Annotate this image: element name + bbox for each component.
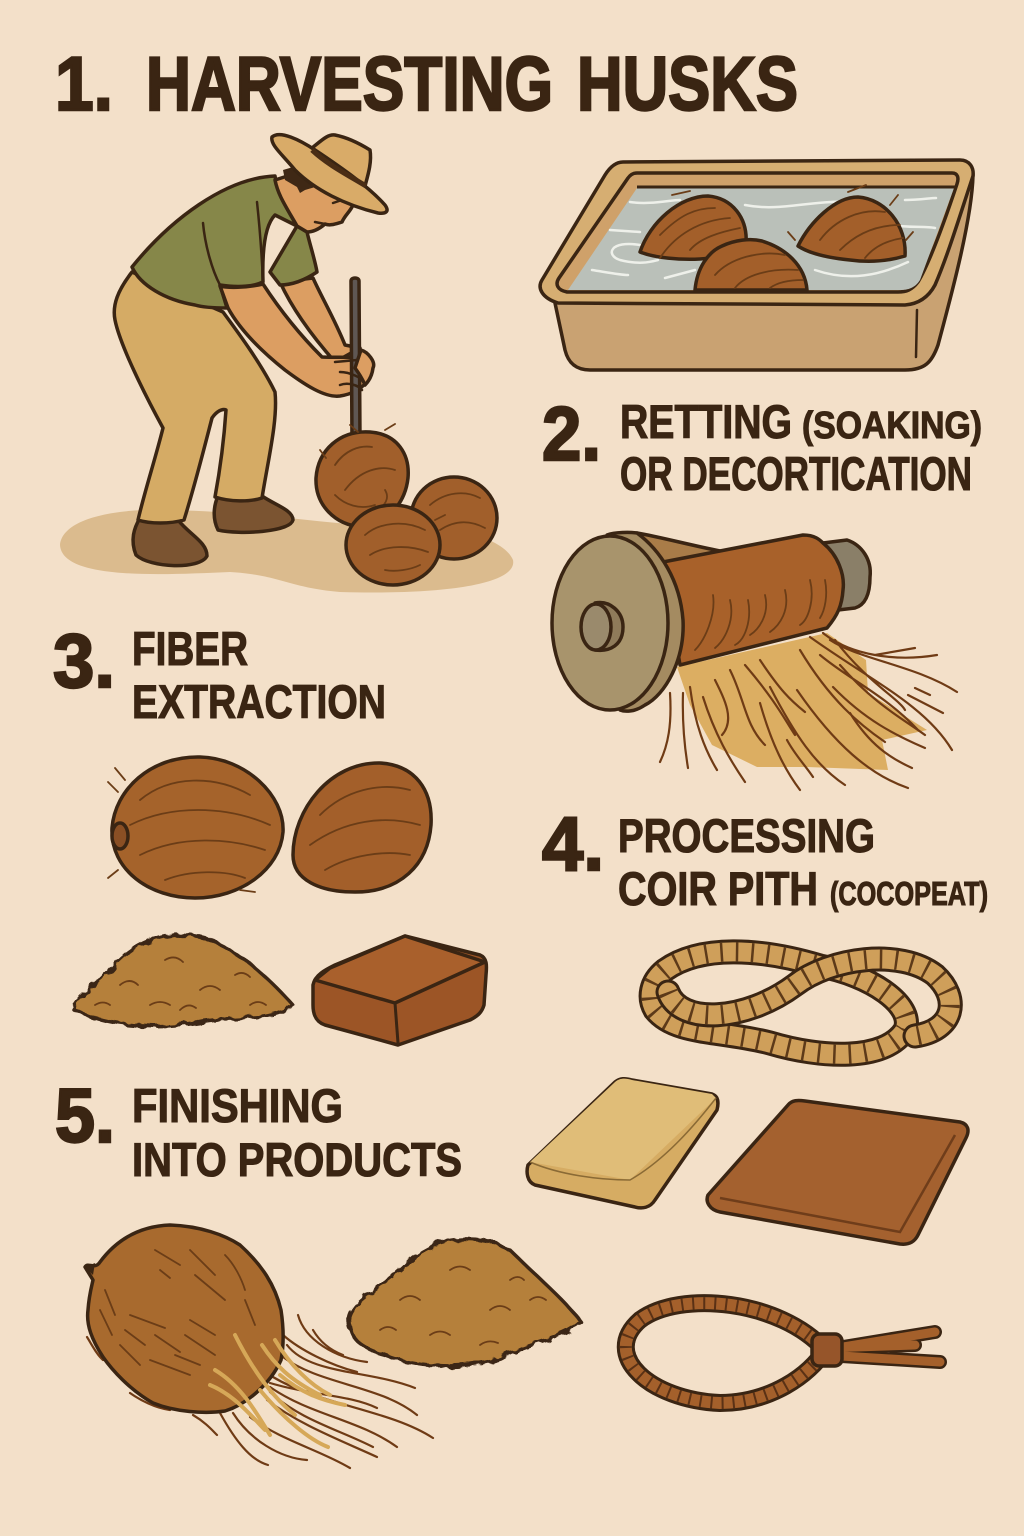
husk: front bbox=[695, 240, 807, 290]
boot: right bbox=[214, 496, 293, 532]
title: step 1 harvesting husks: HARVESTING bbox=[146, 42, 553, 127]
step 4 heading: PROCESSING bbox=[618, 809, 875, 862]
step 5 heading bbox=[132, 1079, 462, 1186]
rope knot bbox=[812, 1334, 842, 1366]
coconut: front bbox=[346, 505, 440, 585]
water bbox=[568, 188, 954, 290]
hair bbox=[283, 165, 322, 193]
roller drum bbox=[663, 535, 843, 665]
title: step 1 harvesting husks: 1. bbox=[55, 42, 113, 127]
golden fibers bbox=[210, 1335, 345, 1447]
illustration: farmer husking coconuts bbox=[60, 135, 513, 593]
step 3 number: 3. bbox=[53, 619, 115, 704]
step 3 heading: EXTRACTION bbox=[132, 675, 386, 728]
illustration: soaking tub with husks bbox=[540, 160, 973, 370]
boot: left bbox=[133, 518, 207, 566]
step 2 number: 2. bbox=[542, 392, 601, 477]
step 4 heading bbox=[618, 809, 988, 915]
shirt folds bbox=[203, 202, 263, 308]
disc hub bbox=[581, 604, 611, 650]
eye and mouth bbox=[315, 200, 342, 224]
step 2 heading: (SOAKING) bbox=[802, 405, 982, 447]
illustration: coir brick bbox=[313, 936, 486, 1045]
title: step 1 harvesting husks bbox=[55, 42, 798, 127]
far arm bbox=[280, 278, 360, 362]
husk: left bbox=[640, 196, 746, 259]
drum texture bbox=[695, 580, 826, 650]
neck and face bbox=[275, 172, 353, 232]
step 4 number: 4. bbox=[542, 802, 604, 887]
tub body bbox=[555, 175, 973, 370]
hub boss bbox=[595, 603, 623, 650]
step 3 heading bbox=[132, 622, 386, 728]
illustration: coiled coir rope bbox=[651, 952, 950, 1054]
roller axle end bbox=[823, 540, 870, 610]
illustration: brown coir board bbox=[707, 1100, 968, 1244]
husk tip bbox=[85, 1263, 95, 1275]
husk: right bbox=[798, 197, 905, 261]
tassel strands bbox=[825, 1332, 940, 1362]
step 5 heading: INTO PRODUCTS bbox=[132, 1133, 462, 1186]
illustration: coir pith pile bbox=[72, 934, 293, 1026]
trousers bbox=[114, 272, 276, 523]
crossing band bbox=[668, 959, 950, 1036]
step 2 heading bbox=[620, 395, 982, 500]
step 2 heading: RETTING bbox=[620, 395, 792, 448]
tub rim bbox=[540, 160, 973, 305]
coconut: on spike bbox=[316, 432, 408, 527]
tub inner wall bbox=[557, 173, 958, 292]
shirt body bbox=[132, 176, 297, 308]
hub flange bbox=[607, 532, 683, 711]
right sleeve bbox=[270, 226, 317, 285]
loose fibers bbox=[87, 1315, 433, 1468]
rear flange bbox=[637, 533, 720, 565]
title: step 1 harvesting husks: HUSKS bbox=[577, 42, 798, 127]
fibers bbox=[660, 633, 957, 790]
illustration: decorticating roller and fibers bbox=[552, 532, 957, 790]
illustration: large husk with fibers bbox=[85, 1225, 433, 1468]
metal spike bbox=[351, 278, 360, 440]
ground shadow bbox=[60, 510, 513, 593]
water ripples bbox=[592, 198, 936, 278]
husk texture bbox=[100, 1250, 255, 1375]
husk texture bbox=[660, 185, 913, 288]
fiber bundle bbox=[677, 633, 927, 770]
tub corner line bbox=[916, 310, 917, 357]
rope loop bbox=[626, 1303, 825, 1403]
outer band bbox=[651, 952, 906, 1054]
disc bbox=[552, 536, 668, 710]
fingers bbox=[335, 360, 366, 390]
illustration: left coconut bbox=[108, 757, 283, 898]
step 5 heading: FINISHING bbox=[132, 1079, 343, 1132]
hat bbox=[272, 135, 387, 213]
illustration: tan coir mat bbox=[527, 1079, 718, 1208]
step 5 number: 5. bbox=[55, 1074, 115, 1159]
illustration: right coconut bbox=[293, 763, 431, 892]
illustration: rope loop with tied tassel bbox=[626, 1303, 940, 1403]
step 3 heading: FIBER bbox=[132, 622, 248, 675]
step 4 heading: COIR PITH bbox=[618, 862, 818, 915]
illustration: second pith pile bbox=[349, 1239, 581, 1366]
near arm bbox=[220, 284, 370, 396]
coconut: right bbox=[411, 477, 497, 559]
husk body bbox=[85, 1225, 283, 1412]
